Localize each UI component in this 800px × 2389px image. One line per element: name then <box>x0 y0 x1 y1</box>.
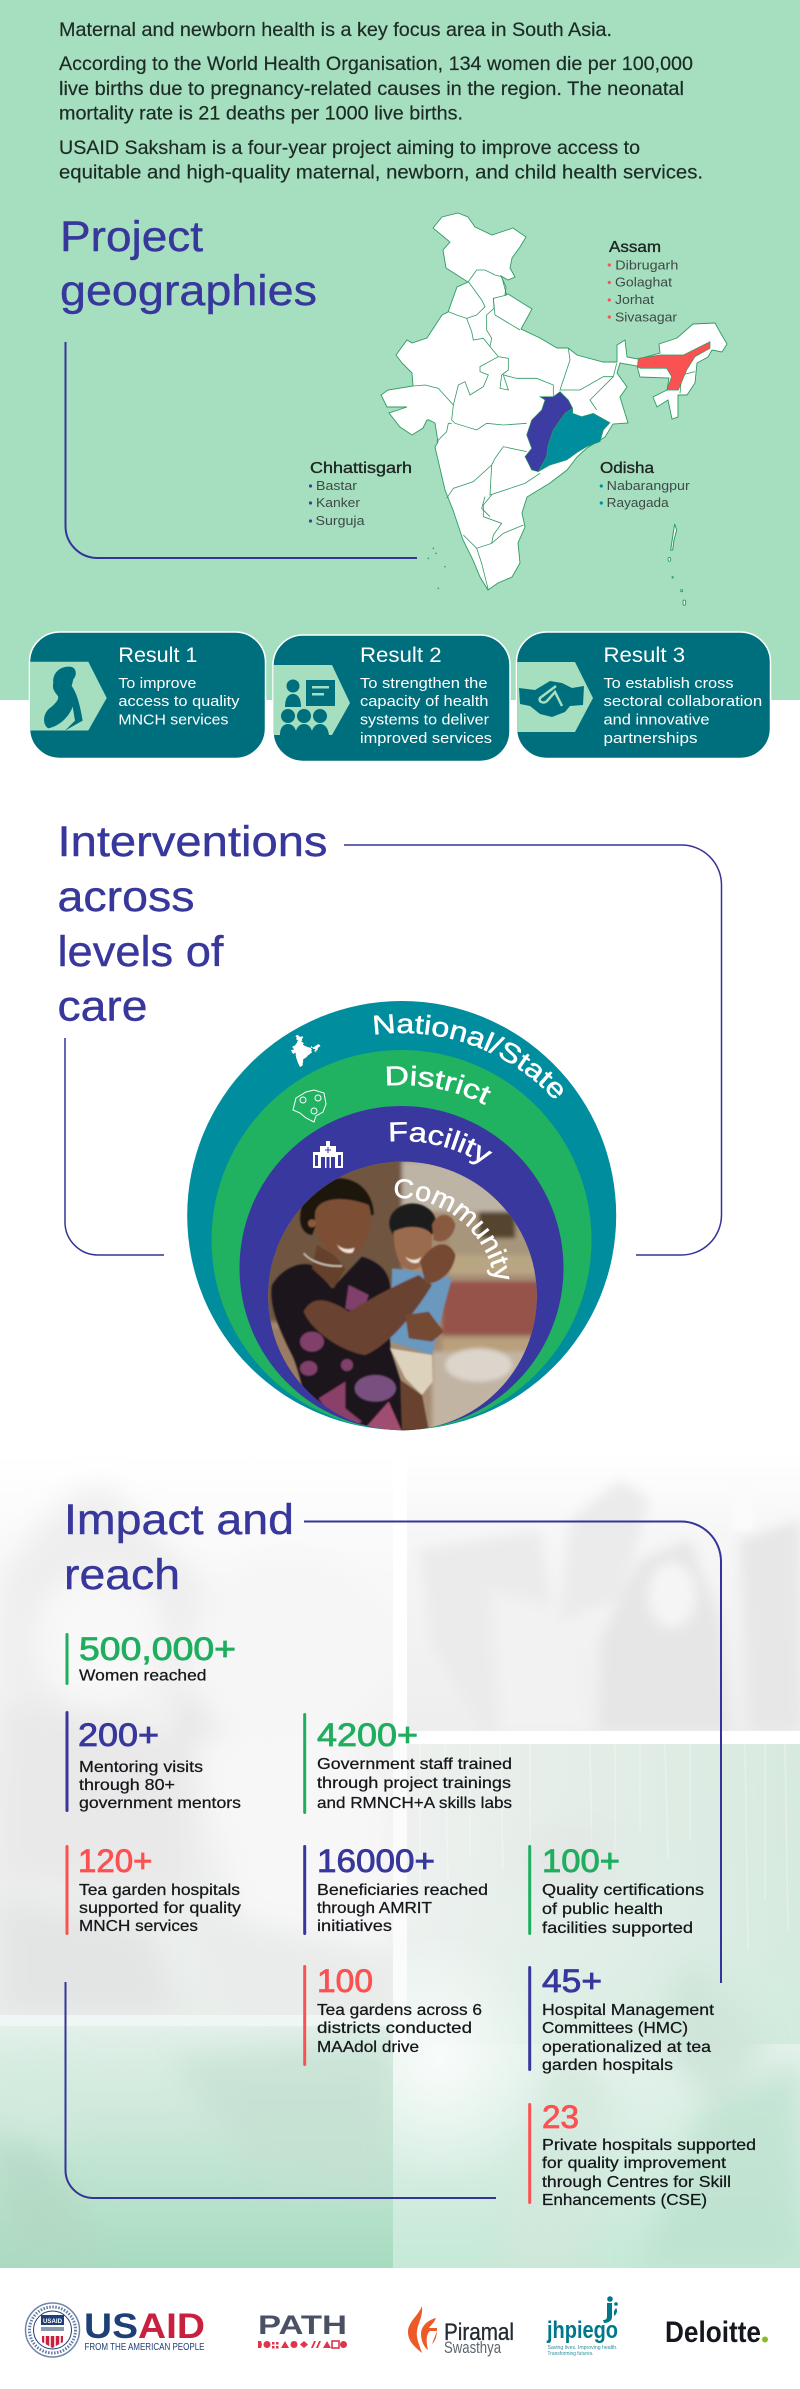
heading: Impact and reach <box>64 1496 294 1599</box>
connector line: project geographies <box>66 342 417 558</box>
label: Odisha districts: Odisha <box>600 460 654 477</box>
stat: 4200+ <box>303 1713 512 1814</box>
connector line: interventions left <box>65 1038 164 1255</box>
stat: 4200+: 4200+ <box>317 1717 418 1753</box>
label: District: District <box>386 1066 491 1105</box>
label: Assam districts <box>608 239 678 325</box>
stat: 23 <box>528 2099 756 2209</box>
intro text block: equitable and high-quality maternal, newborn, and child health services. <box>59 162 703 184</box>
arm and hands <box>304 1275 432 1355</box>
card: Result 3: sectoral collaboration <box>604 693 762 710</box>
stat: 200+: through 80+ <box>79 1777 175 1794</box>
stat: 4200+: through project trainings <box>317 1775 511 1792</box>
connector line: impact top right <box>304 1522 721 1983</box>
stat: 23: for quality improvement <box>542 2155 727 2172</box>
stat: 100: districts conducted <box>317 2020 472 2037</box>
card: Result 1: Result 1 <box>118 644 197 667</box>
logo: PATH <box>258 2310 347 2348</box>
logo: Deloitte: Deloitte <box>665 2316 761 2349</box>
concentric levels of care diagram <box>187 1001 616 1430</box>
label: Chhattisgarh districts <box>309 460 412 528</box>
intro text block: mortality rate is 21 deaths per 1000 live births. <box>59 102 463 124</box>
vertical gap <box>393 1453 407 2053</box>
stat: 45+: Hospital Management <box>542 2002 715 2019</box>
label: Chhattisgarh districts: Kanker <box>316 496 360 510</box>
card: Result 3: and innovative <box>604 712 710 728</box>
Chhattisgarh highlighted <box>525 392 573 472</box>
stat: 100+ <box>528 1843 704 1937</box>
heading: Project geographies: geographies <box>60 267 317 315</box>
label: Odisha districts <box>600 460 690 510</box>
label: Chhattisgarh districts: Surguja <box>316 514 365 528</box>
label: Assam districts: Dibrugarh <box>615 258 678 272</box>
stat: 100+: of public health <box>542 1901 663 1918</box>
intro text block: live births due to pregnancy-related causes in the region. The neonatal <box>59 78 684 100</box>
card: Result 3: partnerships <box>604 730 698 747</box>
heading: Interventions across levels of care: Interventions <box>58 818 328 866</box>
stat: 16000+: through AMRIT <box>317 1900 432 1917</box>
stat: 100 <box>303 1963 482 2066</box>
card: Result 2: To strengthen the <box>360 675 488 692</box>
map of India with highlighted states <box>381 213 727 605</box>
stat: 4200+: Government staff trained <box>317 1756 512 1773</box>
label: Community: Community <box>394 1179 510 1280</box>
sari pattern <box>300 1285 402 1432</box>
stat: 120+: 120+ <box>78 1843 152 1879</box>
photo: mother and child <box>262 1155 542 1435</box>
stat: 120+: supported for quality <box>79 1900 241 1917</box>
horizontal gap: right <box>393 1731 800 1744</box>
stat: 45+: operationalized at tea <box>542 2039 711 2056</box>
woman head <box>300 1178 374 1235</box>
stat: 100: MAAdol drive <box>317 2039 419 2056</box>
stat: 23: through Centres for Skill <box>542 2174 731 2191</box>
logo: PATH: PATH <box>258 2310 347 2340</box>
card: Result 3: To establish cross <box>604 675 734 692</box>
arrow tab 3 <box>517 662 593 732</box>
label: Assam districts: Sivasagar <box>615 311 677 325</box>
stat: 200+: 200+ <box>78 1717 159 1753</box>
stat: 200+: government mentors <box>79 1795 241 1812</box>
stat: 200+: Mentoring visits <box>79 1759 203 1776</box>
band gap: left <box>0 2015 393 2026</box>
curved label paths <box>373 1033 581 1136</box>
logo: USAID: USAID <box>84 2307 205 2346</box>
stat: 16000+: initiatives <box>317 1918 392 1935</box>
ring: district <box>212 1050 592 1430</box>
label: Chhattisgarh districts: Chhattisgarh <box>310 460 412 477</box>
islands <box>428 524 686 605</box>
stat: 100: 100 <box>317 1963 373 1999</box>
label: Odisha districts: Nabarangpur <box>607 479 690 493</box>
stat: 100+: Quality certifications <box>542 1882 704 1899</box>
logo: jhpiego: Transforming futures. <box>548 2351 594 2357</box>
woman body <box>271 1257 429 1432</box>
heading: Interventions across levels of care: levels of <box>58 928 225 976</box>
heading: Interventions across levels of care: across <box>58 873 194 921</box>
label: National/State: National/State <box>374 1014 563 1098</box>
icon: India <box>291 1035 320 1067</box>
stat: 45+: garden hospitals <box>542 2057 673 2074</box>
label: Assam districts: Jorhat <box>615 293 655 307</box>
logo: USAID <box>26 2303 205 2357</box>
intro text block: According to the World Health Organisation, 134 women die per 100,000 <box>59 53 693 75</box>
heading: Impact and reach: Impact and <box>64 1496 294 1544</box>
arrow tab 2 <box>274 665 350 735</box>
card: Result 3 <box>516 632 770 758</box>
photo panel: top left <box>0 1453 393 2015</box>
stat: 120+: MNCH services <box>79 1918 198 1935</box>
arrow tab 1 <box>30 662 107 730</box>
intro text block: Maternal and newborn health is a key focus area in South Asia. <box>59 19 612 41</box>
India outline <box>381 213 727 590</box>
card: Result 1: access to quality <box>118 693 240 710</box>
logo: USAID: USAID <box>43 2318 62 2325</box>
label: Assam districts: Golaghat <box>615 276 673 290</box>
logo: jhpiego: jhpiego <box>546 2317 618 2344</box>
stat: 23: Private hospitals supported <box>542 2137 756 2154</box>
photo panel: bottom left <box>0 2026 393 2268</box>
stat: 45+: Committees (HMC) <box>542 2020 688 2037</box>
icon: hospital <box>313 1141 343 1168</box>
stat: 120+: Tea garden hospitals <box>79 1882 240 1899</box>
icon: handshake <box>519 681 584 717</box>
card: Result 2: systems to deliver <box>360 712 489 728</box>
stat: 16000+: 16000+ <box>317 1843 435 1879</box>
stat: 45+ <box>528 1963 715 2074</box>
label: Odisha districts: Rayagada <box>607 496 669 510</box>
stat: 16000+ <box>303 1843 488 1935</box>
stat: 45+: 45+ <box>542 1963 602 1999</box>
card: Result 2: Result 2 <box>360 644 442 667</box>
ring: national/state <box>187 1001 616 1430</box>
connector line: impact bottom left <box>66 1982 496 2198</box>
photo panel: lower right <box>393 1744 800 2268</box>
card: Result 1 <box>30 632 266 758</box>
heading: Impact and reach: reach <box>64 1551 180 1599</box>
stat: 23: Enhancements (CSE) <box>542 2192 707 2209</box>
label: Chhattisgarh districts: Bastar <box>316 479 357 493</box>
logo: jhpiego: Saving lives. Improving health. <box>548 2345 618 2351</box>
ring: facility <box>240 1106 564 1430</box>
intro text block: USAID Saksham is a four-year project aiming to improve access to <box>59 137 640 159</box>
photo panel: top right <box>407 1453 800 1731</box>
icon: district map <box>293 1090 326 1122</box>
stat: 100+: 100+ <box>542 1843 620 1879</box>
card: Result 2: capacity of health <box>360 693 488 710</box>
heading: Project geographies: Project <box>60 213 203 261</box>
card: Result 3: Result 3 <box>604 644 685 667</box>
stat: 500,000+ <box>66 1631 236 1685</box>
logo: Piramal Swasthya <box>408 2306 514 2357</box>
faded photo background: impact section <box>0 1453 800 2268</box>
logo: USAID: FROM THE AMERICAN PEOPLE <box>84 2342 205 2353</box>
heading: Project geographies <box>60 213 317 315</box>
label: Facility: Facility <box>390 1122 492 1164</box>
stat: 120+ <box>66 1843 241 1935</box>
stat: 100+: facilities supported <box>542 1920 693 1937</box>
stat: 16000+: Beneficiaries reached <box>317 1882 488 1899</box>
internal state borders <box>413 270 553 517</box>
stat: 200+ <box>66 1711 241 1812</box>
card: Result 2: improved services <box>360 730 492 747</box>
Assam highlighted <box>637 342 710 390</box>
mint background of top section <box>0 0 800 700</box>
label: Assam districts: Assam <box>609 239 661 256</box>
child <box>390 1268 452 1355</box>
stat: 500,000+: Women reached <box>79 1668 206 1685</box>
logo: Piramal Swasthya: Swasthya <box>444 2338 501 2357</box>
heading: Interventions across levels of care <box>58 818 328 1030</box>
stat: 23: 23 <box>542 2099 579 2135</box>
Odisha highlighted <box>538 408 610 472</box>
logo: jhpiego <box>546 2296 618 2357</box>
card: Result 1: MNCH services <box>118 712 228 728</box>
heading: Interventions across levels of care: care <box>58 982 148 1030</box>
intro text block <box>59 19 703 184</box>
connector line: interventions right <box>344 845 722 1255</box>
logo: Piramal Swasthya: Piramal <box>444 2319 514 2346</box>
necklace <box>304 1253 342 1266</box>
card: Result 2 <box>273 635 510 762</box>
card: Result 1: To improve <box>118 675 196 692</box>
stat: 100: Tea gardens across 6 <box>317 2002 482 2019</box>
stat: 500,000+: 500,000+ <box>79 1631 236 1667</box>
icon: people with board <box>280 680 335 735</box>
icon: pregnant woman <box>44 667 83 731</box>
stat: 4200+: and RMNCH+A skills labs <box>317 1795 512 1812</box>
